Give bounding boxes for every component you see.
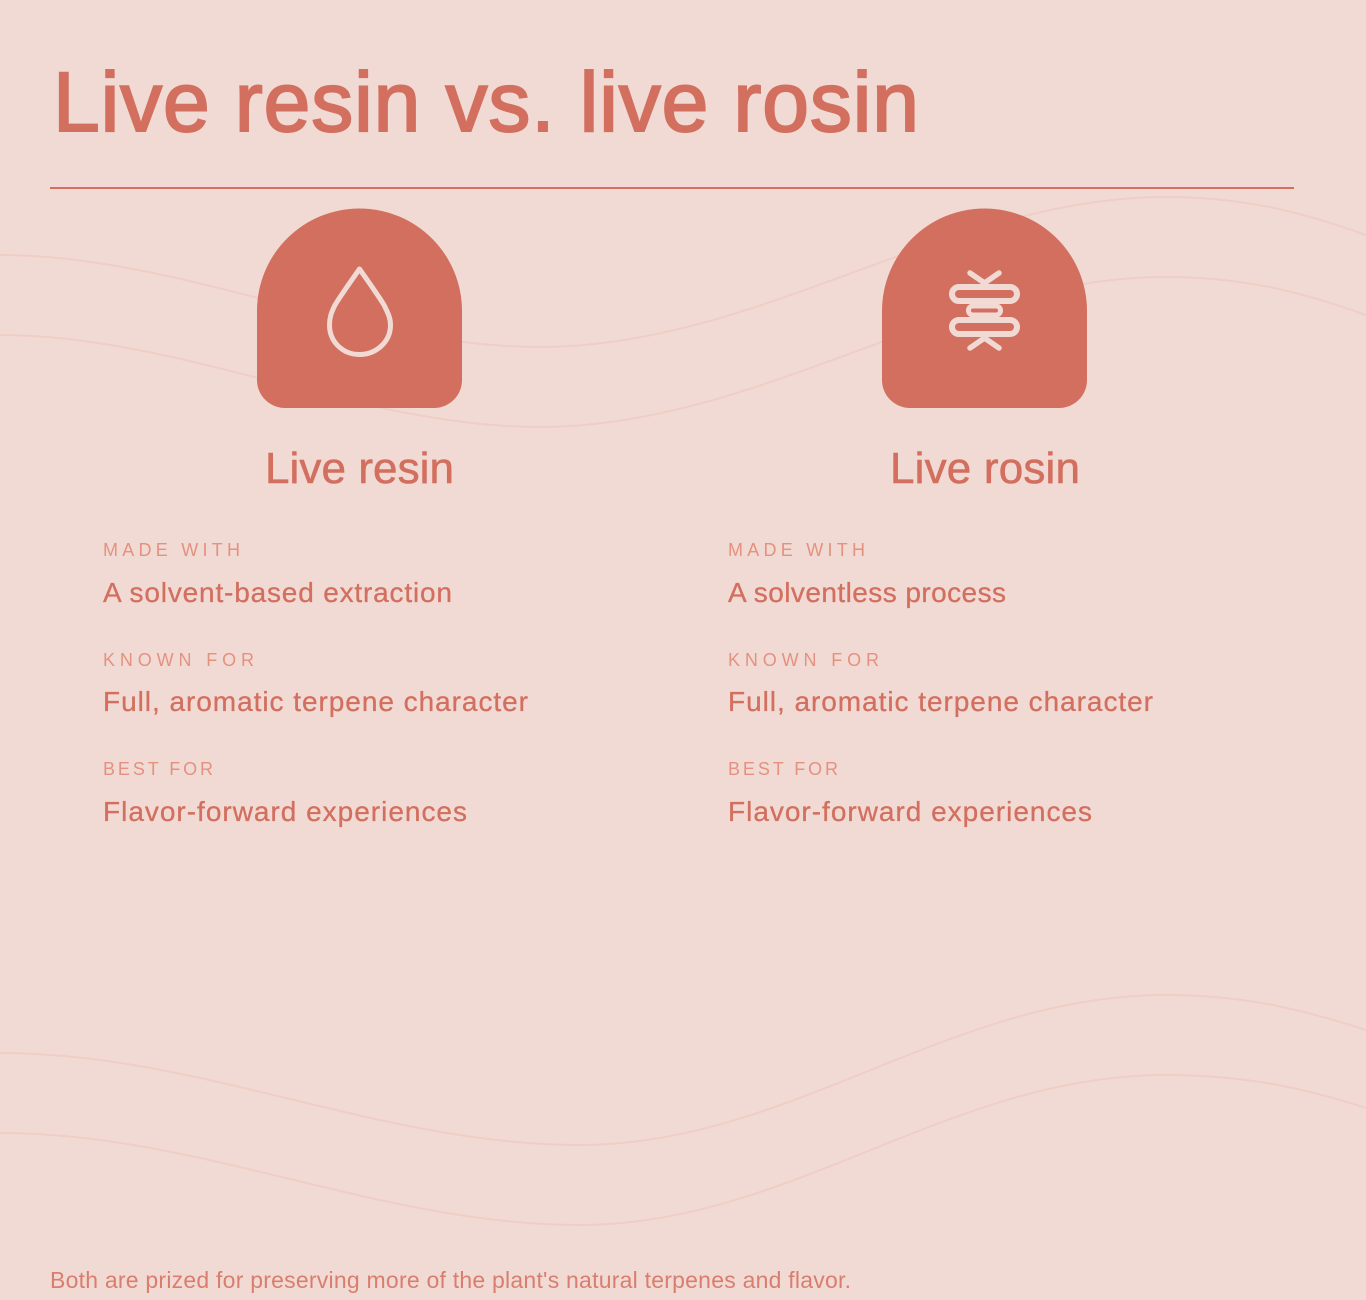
made with: MADE WITH	[728, 540, 865, 560]
known for	[728, 650, 1153, 717]
made with	[728, 540, 1006, 608]
best for	[103, 759, 467, 827]
best for	[728, 759, 1092, 827]
made with: MADE WITH	[103, 540, 240, 560]
made with	[103, 540, 452, 608]
known for	[103, 650, 528, 717]
best for: BEST FOR	[103, 759, 213, 779]
best for: Flavor-forward experiences	[103, 796, 467, 827]
known for: Full, aromatic terpene character	[728, 686, 1153, 717]
panel: live resin	[103, 208, 528, 827]
known for: KNOWN FOR	[103, 650, 254, 670]
made with: A solventless process	[728, 577, 1006, 608]
known for: Full, aromatic terpene character	[103, 686, 528, 717]
best for: Flavor-forward experiences	[728, 796, 1092, 827]
footnote: Both are prized for preserving more of the plant's natural terpenes and flavor.	[50, 1267, 851, 1293]
heading: live rosin: Live rosin	[890, 444, 1080, 493]
title: Live resin vs. live rosin	[53, 55, 919, 149]
icon: pressed rosin	[882, 208, 1087, 408]
panel: live rosin	[728, 208, 1153, 827]
best for: BEST FOR	[728, 759, 838, 779]
heading: live resin: Live resin	[265, 444, 454, 493]
icon: water drop	[257, 208, 462, 408]
made with: A solvent-based extraction	[103, 577, 452, 608]
known for: KNOWN FOR	[728, 650, 879, 670]
